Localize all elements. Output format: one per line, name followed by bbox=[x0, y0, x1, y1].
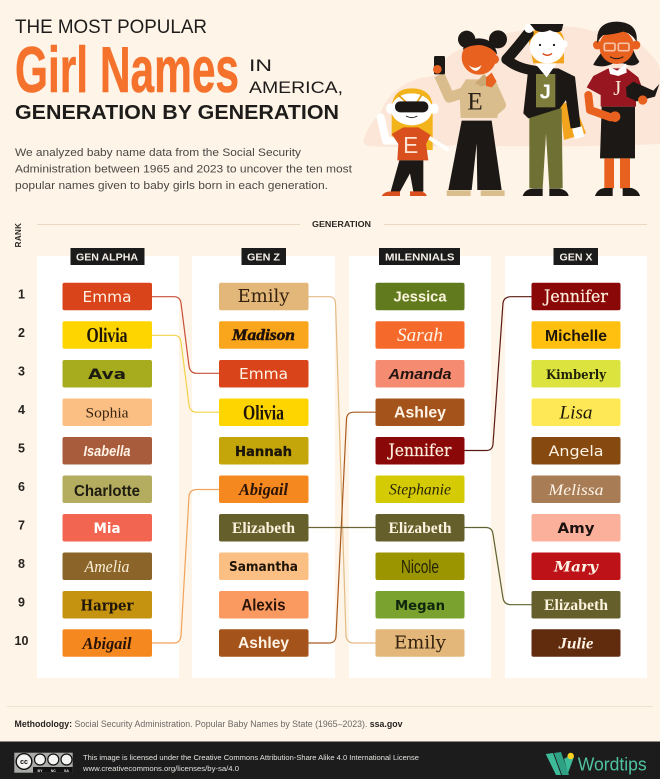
name: Sophia: Sophia bbox=[86, 406, 129, 422]
methodology: Methodology: Social Security Administration. Popular Baby Names by State (1965–2023). ssa.gov bbox=[14, 719, 403, 729]
name: Charlotte: Charlotte bbox=[74, 483, 140, 500]
name: Megan bbox=[376, 591, 464, 618]
license badge: SA bbox=[64, 769, 69, 773]
license badge: NC bbox=[51, 769, 56, 773]
name: Amy bbox=[532, 514, 620, 542]
column: gen alpha names bbox=[62, 283, 152, 657]
illustration background blob bbox=[363, 26, 660, 147]
name: Kimberly bbox=[532, 360, 620, 388]
name: Elizabeth bbox=[532, 591, 620, 618]
name: Melissa: Melissa bbox=[547, 482, 604, 499]
header: millennials: MILENNIALS bbox=[385, 252, 454, 264]
name: Olivia bbox=[62, 321, 152, 349]
rank numbers: 2 bbox=[18, 326, 25, 340]
footer bar bbox=[0, 742, 660, 779]
name: Jessica: Jessica bbox=[394, 288, 447, 306]
name: Emma bbox=[62, 283, 152, 310]
name: Isabella bbox=[62, 437, 152, 464]
name: Lisa bbox=[532, 398, 620, 426]
name: Olivia: Olivia bbox=[243, 400, 284, 424]
name: Emily: Emily bbox=[394, 634, 446, 654]
name: Samantha: Samantha bbox=[229, 560, 298, 575]
character: gen x woman with book: J bbox=[613, 78, 621, 100]
license badge: BY bbox=[38, 769, 43, 773]
intro text: Administration between 1965 and 2023 to uncover the ten most bbox=[15, 164, 352, 176]
name: Melissa bbox=[532, 476, 620, 503]
name: Alexis bbox=[219, 591, 308, 618]
wordtips logo: Wordtips bbox=[578, 755, 647, 775]
name: Angela bbox=[532, 437, 620, 464]
name: Madison bbox=[219, 321, 308, 349]
header: gen x: GEN X bbox=[560, 252, 592, 264]
name: Emily bbox=[219, 283, 308, 310]
rank numbers: 6 bbox=[18, 480, 25, 494]
name: Alexis: Alexis bbox=[242, 596, 286, 614]
name: Jessica bbox=[376, 283, 464, 310]
name: Olivia: Olivia bbox=[86, 323, 128, 347]
name: Michelle bbox=[532, 321, 620, 349]
name: Abigail: Abigail bbox=[238, 480, 288, 499]
wordtips logo bbox=[546, 752, 647, 775]
intro text: We analyzed baby name data from the Social Security bbox=[15, 147, 302, 159]
header: gen alpha: GEN ALPHA bbox=[76, 252, 138, 264]
name: Jennifer: Jennifer bbox=[542, 287, 609, 307]
name: Abigail bbox=[219, 476, 308, 503]
name: Julie bbox=[532, 629, 620, 657]
name: Julie: Julie bbox=[557, 636, 594, 652]
rank numbers: 1 bbox=[18, 288, 25, 302]
name: Ashley bbox=[219, 629, 308, 657]
column: gen z names bbox=[219, 283, 308, 657]
intro text bbox=[15, 147, 352, 192]
character: gen z girl with phone: E bbox=[467, 87, 483, 115]
axis label: rank: RANK bbox=[14, 223, 23, 247]
character: gen z girl with phone bbox=[433, 30, 507, 196]
name: Madison: Madison bbox=[231, 327, 295, 344]
title bbox=[15, 16, 343, 124]
name: Megan: Megan bbox=[395, 598, 445, 614]
rank numbers: 10 bbox=[15, 634, 28, 648]
name: Ashley bbox=[376, 398, 464, 426]
name: Samantha bbox=[219, 552, 308, 580]
character: gen alpha girl: E bbox=[403, 132, 418, 158]
name: Ava bbox=[62, 360, 152, 388]
header: millennials bbox=[379, 248, 460, 265]
name: Harper: Harper bbox=[80, 596, 134, 614]
name: Mary: Mary bbox=[553, 560, 599, 576]
name: Elizabeth bbox=[219, 514, 308, 542]
license text: www.creativecommons.org/licenses/by-sa/4.0 bbox=[82, 764, 239, 773]
license text bbox=[82, 753, 419, 773]
title: IN bbox=[249, 56, 272, 75]
name: Isabella: Isabella bbox=[84, 444, 130, 460]
rank numbers: 3 bbox=[18, 364, 25, 378]
character: gen alpha girl bbox=[381, 88, 447, 196]
illustration: four generations bbox=[363, 22, 660, 196]
rank numbers: 4 bbox=[18, 403, 25, 417]
title: GENERATION BY GENERATION bbox=[15, 101, 339, 124]
connector lines bbox=[152, 297, 532, 643]
name: Sophia bbox=[62, 398, 152, 426]
title: Girl Names bbox=[15, 33, 239, 106]
license text: This image is licensed under the Creative Commons Attribution-Share Alike 4.0 International License bbox=[83, 753, 419, 762]
name: Emma: Emma bbox=[239, 365, 288, 383]
name: Ashley: Ashley bbox=[394, 404, 446, 422]
column: millennials names bbox=[376, 283, 464, 657]
name: Lisa: Lisa bbox=[558, 402, 592, 424]
intro text: popular names given to baby girls born in each generation. bbox=[15, 180, 328, 192]
license badge: cc bbox=[20, 759, 28, 766]
name: Angela: Angela bbox=[548, 444, 604, 460]
character: gen x woman with book bbox=[587, 22, 659, 196]
name: Ashley: Ashley bbox=[238, 635, 289, 652]
panel: gen alpha background bbox=[37, 256, 179, 678]
name: Elizabeth bbox=[376, 514, 464, 542]
name: Mia: Mia bbox=[94, 521, 120, 537]
name: Sarah: Sarah bbox=[397, 325, 443, 346]
name: Abigail: Abigail bbox=[82, 634, 132, 653]
panel: gen z background bbox=[192, 256, 335, 678]
rank numbers: 5 bbox=[18, 442, 25, 456]
title: THE MOST POPULAR bbox=[15, 16, 207, 38]
name: Hannah: Hannah bbox=[235, 444, 292, 460]
header: gen x bbox=[554, 248, 598, 265]
name: Harper bbox=[62, 591, 152, 618]
name: Amelia bbox=[62, 552, 152, 580]
name: Hannah bbox=[219, 437, 308, 464]
name: Charlotte bbox=[62, 476, 152, 503]
name: Michelle: Michelle bbox=[545, 328, 607, 345]
name: Jennifer bbox=[376, 437, 464, 464]
name: Mary bbox=[532, 552, 620, 580]
rank numbers: 8 bbox=[18, 557, 25, 571]
name: Mia bbox=[62, 514, 152, 542]
name: Jennifer: Jennifer bbox=[387, 441, 452, 461]
name: Nicole bbox=[376, 552, 464, 580]
axis label: generation: GENERATION bbox=[312, 220, 371, 229]
column: gen x names bbox=[532, 283, 620, 657]
name: Olivia bbox=[219, 398, 308, 426]
name: Kimberly: Kimberly bbox=[546, 368, 606, 383]
rank numbers bbox=[15, 288, 28, 648]
character: millennial with sunglasses: J bbox=[540, 82, 551, 104]
name: Elizabeth: Elizabeth bbox=[388, 520, 452, 537]
character: millennial with sunglasses bbox=[507, 24, 586, 196]
name: Stephanie bbox=[376, 476, 464, 503]
rank numbers: 9 bbox=[18, 596, 25, 610]
panel: millennials background bbox=[349, 256, 491, 678]
name: Emily bbox=[376, 629, 464, 657]
title: AMERICA, bbox=[249, 78, 343, 97]
name: Stephanie: Stephanie bbox=[389, 482, 451, 498]
name: Elizabeth: Elizabeth bbox=[232, 520, 295, 537]
license badge bbox=[14, 753, 73, 773]
name: Sarah bbox=[376, 321, 464, 349]
name: Emma: Emma bbox=[82, 288, 132, 306]
header: gen alpha bbox=[70, 248, 144, 265]
name: Amy: Amy bbox=[558, 521, 594, 537]
name: Emily: Emily bbox=[238, 287, 290, 307]
panel: gen x background bbox=[505, 256, 647, 678]
header: gen z: GEN Z bbox=[247, 252, 281, 264]
name: Emma bbox=[219, 360, 308, 388]
rank numbers: 7 bbox=[18, 518, 25, 532]
header: gen z bbox=[242, 248, 286, 265]
name: Ava: Ava bbox=[88, 367, 126, 383]
name: Elizabeth: Elizabeth bbox=[544, 597, 608, 614]
name: Amelia: Amelia bbox=[84, 557, 130, 576]
name: Amanda bbox=[376, 360, 464, 388]
name: Abigail bbox=[62, 629, 152, 657]
name: Jennifer bbox=[532, 283, 620, 310]
name: Nicole: Nicole bbox=[401, 557, 439, 577]
name: Amanda: Amanda bbox=[387, 366, 452, 383]
